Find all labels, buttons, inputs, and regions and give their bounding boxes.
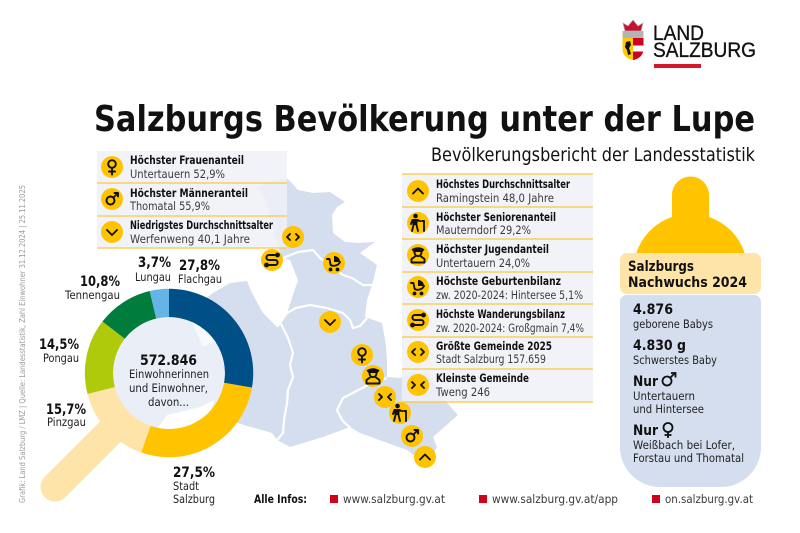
row: Höchste Geburtenbilanz: Höchste Geburtenbilanz bbox=[436, 274, 561, 288]
magnifier handle bbox=[55, 417, 125, 487]
row: Höchste Geburtenbilanz bbox=[407, 274, 583, 302]
bottle label: Nachwuchs 2024 bbox=[628, 275, 747, 291]
footer links: Alle Infos: bbox=[254, 492, 307, 506]
row: Höchster Jugendanteil: Untertauern 24,0% bbox=[436, 256, 530, 270]
stat: only boys: Nur bbox=[633, 374, 659, 390]
row: Kleinste Gemeinde: Tweng 246 bbox=[435, 385, 490, 399]
row: Niedrigstes Durchschnittsalter: Niedrigstes Durchschnittsalter bbox=[130, 218, 273, 232]
stat: only girls: Nur bbox=[633, 423, 659, 439]
row: Höchste Wanderungsbilanz: zw. 2020-2024: Großgmain 7,4% bbox=[436, 321, 584, 335]
left ranking panel bbox=[97, 151, 287, 248]
bottle teat bbox=[636, 176, 745, 254]
label: Lungau: 3,7% bbox=[138, 255, 171, 271]
label: Stadt Salzburg: Salzburg bbox=[173, 492, 215, 506]
donut center text: davon... bbox=[148, 395, 189, 409]
row: Höchstes Durchschnittsalter: Höchstes Durchschnittsalter bbox=[436, 177, 570, 191]
label: Stadt Salzburg: Stadt bbox=[173, 479, 199, 493]
row: Größte Gemeinde 2025 bbox=[407, 339, 552, 366]
row: Niedrigstes Durchschnittsalter bbox=[101, 218, 273, 246]
row: Höchstes Durchschnittsalter: Ramingstein 48,0 Jahre bbox=[436, 191, 554, 205]
label: Flachgau: 27,8% bbox=[179, 258, 220, 274]
map markers bbox=[261, 226, 436, 468]
label: Lungau: Lungau bbox=[135, 270, 171, 284]
right ranking panel bbox=[402, 174, 593, 402]
row: Höchste Wanderungsbilanz: Höchste Wanderungsbilanz bbox=[436, 307, 565, 321]
stat: only girls bbox=[633, 423, 744, 465]
label: Pinzgau bbox=[46, 402, 86, 429]
lens with map detail bbox=[113, 317, 226, 432]
label: Pinzgau: 15,7% bbox=[46, 402, 86, 418]
label: Pongau: 14,5% bbox=[39, 337, 79, 353]
row: Höchster Männeranteil bbox=[101, 186, 248, 213]
row: Kleinste Gemeinde bbox=[407, 371, 529, 399]
row: Höchster Männeranteil: Thomatal 55,9% bbox=[129, 199, 210, 213]
row: Höchster Seniorenanteil bbox=[407, 210, 556, 237]
stat: only girls: Forstau und Thomatal bbox=[633, 451, 744, 465]
row: Höchster Frauenanteil bbox=[101, 153, 244, 181]
baby bottle panel bbox=[620, 176, 761, 487]
row: Höchstes Durchschnittsalter bbox=[407, 177, 570, 205]
map of Salzburg districts bbox=[170, 179, 458, 465]
donut center text bbox=[129, 353, 209, 409]
row: Höchster Frauenanteil: Höchster Frauenanteil bbox=[130, 153, 244, 167]
label: Pongau bbox=[39, 337, 79, 365]
stat: only boys: und Hintersee bbox=[633, 402, 704, 416]
logo: Land Salzburg: SALZBURG bbox=[653, 39, 756, 62]
row: Niedrigstes Durchschnittsalter: Werfenweng 40,1 Jahre bbox=[130, 232, 250, 246]
row: Höchster Seniorenanteil: Höchster Seniorenanteil bbox=[436, 210, 556, 224]
row: Höchster Jugendanteil: Höchster Jugendanteil bbox=[436, 242, 549, 256]
label: Pinzgau: Pinzgau bbox=[47, 415, 86, 429]
row: Höchster Jugendanteil bbox=[407, 242, 549, 270]
stat: born babies bbox=[633, 302, 713, 331]
stat: born babies: geborene Babys bbox=[633, 317, 713, 331]
logo: Land Salzburg bbox=[622, 20, 756, 68]
stat: only girls: Weißbach bei Lofer, bbox=[633, 438, 735, 452]
stat: heaviest baby bbox=[633, 338, 717, 367]
row: Höchster Männeranteil: Höchster Männeranteil bbox=[130, 186, 248, 200]
footer links: www.salzburg.gv.at bbox=[343, 492, 445, 506]
row: Größte Gemeinde 2025: Stadt Salzburg 157.659 bbox=[436, 352, 546, 366]
bottle label bbox=[620, 253, 761, 294]
stat: only boys bbox=[633, 373, 704, 416]
row: Größte Gemeinde 2025: Größte Gemeinde 2025 bbox=[436, 339, 552, 353]
logo: Land Salzburg: LAND bbox=[653, 22, 704, 45]
label: Tennengau: 10,8% bbox=[80, 274, 120, 290]
label: Pongau: Pongau bbox=[43, 351, 79, 365]
footer links bbox=[254, 492, 753, 506]
label: Stadt Salzburg bbox=[173, 465, 215, 506]
stat: heaviest baby: 4.830 g bbox=[633, 338, 686, 354]
source credit: Grafik: Land Salzburg / LMZ | Quelle: Landesstatistik, Zahl Einwohner 31.12.2024 | 25.11.2025 bbox=[18, 185, 27, 503]
stat: born babies: 4.876 bbox=[633, 302, 673, 318]
bottle label: Salzburgs bbox=[628, 259, 694, 275]
row: Höchste Geburtenbilanz: zw. 2020-2024: Hintersee 5,1% bbox=[436, 288, 583, 302]
bottle body bbox=[620, 295, 761, 487]
label: Tennengau: Tennengau bbox=[64, 288, 120, 302]
label: Flachgau: Flachgau bbox=[178, 272, 222, 286]
label: Flachgau bbox=[178, 258, 222, 286]
row: Höchster Seniorenanteil: Mauterndorf 29,2% bbox=[436, 223, 531, 237]
label: Tennengau bbox=[64, 274, 120, 302]
label: Lungau bbox=[135, 255, 171, 284]
stat: heaviest baby: Schwerstes Baby bbox=[633, 353, 717, 367]
donut center text: und Einwohner, bbox=[129, 381, 208, 395]
donut center text: 572.846 bbox=[140, 353, 197, 369]
row: Höchste Wanderungsbilanz bbox=[407, 307, 584, 335]
stat: only boys: Untertauern bbox=[633, 389, 695, 403]
footer links: on.salzburg.gv.at bbox=[665, 492, 753, 506]
row: Höchster Frauenanteil: Untertauern 52,9% bbox=[130, 167, 225, 181]
row: Kleinste Gemeinde: Kleinste Gemeinde bbox=[436, 371, 529, 385]
donut chart: population share by district bbox=[99, 303, 239, 443]
label: Stadt Salzburg: 27,5% bbox=[173, 465, 215, 481]
donut center text: Einwohnerinnen bbox=[129, 367, 209, 381]
footer links: www.salzburg.gv.at/app bbox=[492, 492, 618, 506]
